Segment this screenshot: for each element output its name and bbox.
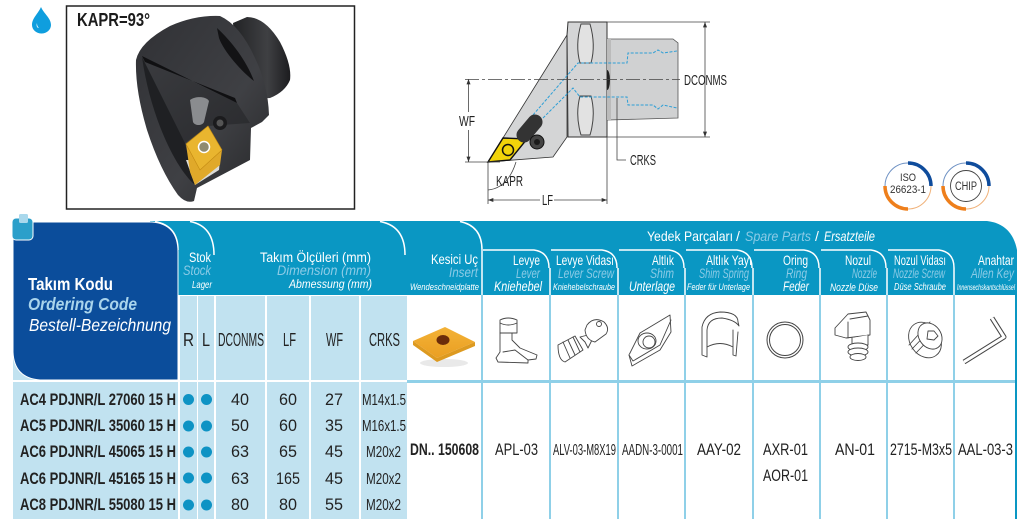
- dimension labels: LF: [542, 193, 553, 209]
- technical drawing with dimensions: [456, 22, 727, 209]
- table header band: [150, 221, 1017, 519]
- row 3: 45: [325, 442, 343, 461]
- icon: allen key: [964, 318, 1004, 362]
- tool head: [488, 22, 678, 162]
- insert and clamp: [488, 122, 544, 162]
- header: shim spring: Feder für Unterlage: [687, 282, 750, 293]
- header: insert: Insert: [449, 265, 479, 280]
- header: ring: Oring: [783, 252, 808, 268]
- row 4: [20, 469, 401, 488]
- row 5: 80: [279, 495, 297, 514]
- header: nozzle screw: Nozzle Screw: [893, 265, 946, 281]
- column labels: WF: [326, 330, 343, 350]
- row 3: AC6 PDJNR/L 45065 15 H: [20, 442, 176, 461]
- dimension lines: [456, 22, 710, 206]
- header: dimensions: Abmessung (mm): [288, 277, 372, 291]
- icon: coolant water drop: [32, 7, 51, 34]
- header: lever screw: Kniehebelschraube: [553, 282, 615, 293]
- icon: shim: [629, 315, 671, 366]
- header: lever: [494, 252, 543, 294]
- header: stock: Stok: [189, 250, 211, 265]
- header: lever screw: [553, 252, 615, 293]
- row 3: [20, 442, 401, 461]
- header: allen key: [957, 252, 1016, 292]
- row 1: 27: [325, 390, 343, 409]
- header: shim spring: [687, 252, 752, 293]
- part numbers: AADN-3-0001: [622, 442, 683, 459]
- icon: insert photo: [413, 327, 475, 367]
- header: insert: [410, 252, 479, 293]
- header: shim spring: Altlık Yayı: [706, 252, 752, 268]
- panel: ordering code heading: Ordering Code: [28, 294, 137, 314]
- icon: O-ring: [767, 322, 803, 358]
- header: nozzle: Nozzle Düse: [830, 282, 878, 294]
- column labels: [183, 330, 400, 350]
- icon: clipboard tab: [12, 214, 33, 240]
- row 1: M14x1.5: [362, 392, 406, 409]
- tool body render: [136, 16, 290, 202]
- dimension labels: KAPR: [496, 174, 523, 190]
- part numbers: 2715-M3x5: [890, 440, 952, 459]
- row 4: 165: [276, 469, 300, 488]
- icon: lever: [496, 318, 537, 363]
- part numbers: APL-03: [495, 440, 538, 459]
- header: shim: [629, 252, 675, 294]
- header: spare parts: Spare Parts: [745, 228, 811, 244]
- badge: ISO 26623-1: [885, 163, 931, 209]
- header: dimensions: Takım Ölçüleri (mm): [260, 250, 371, 265]
- badge: ISO 26623-1: ISO: [900, 172, 916, 184]
- header: nozzle: Nozul: [845, 252, 871, 268]
- header: spare parts: [647, 228, 875, 244]
- row 2: [20, 416, 406, 435]
- header: spare parts: Yedek Parçaları: [647, 228, 733, 244]
- column labels: CRKS: [369, 330, 400, 350]
- row 3: 63: [231, 442, 249, 461]
- light blue data columns: [13, 296, 407, 519]
- row 1: 40: [231, 390, 249, 409]
- header: shim spring: Shim Spring: [699, 265, 749, 281]
- badge: ISO 26623-1: 26623-1: [890, 184, 926, 196]
- part numbers: AXR-01: [763, 440, 808, 459]
- header: lever screw: Lever Screw: [558, 265, 615, 281]
- header: shim: Unterlage: [629, 278, 675, 294]
- white spare-part column area: [407, 250, 1015, 519]
- icon: nozzle screw: [902, 316, 948, 364]
- header: nozzle: Nozzle: [852, 265, 877, 281]
- header: lever: Kniehebel: [494, 278, 543, 294]
- header: ring: [783, 252, 810, 294]
- row 3: M20x2: [366, 444, 401, 461]
- column labels: L: [202, 330, 210, 350]
- dimension labels: WF: [459, 114, 475, 130]
- part numbers: AOR-01: [763, 466, 808, 485]
- badge: CHIP: CHIP: [955, 181, 977, 193]
- row 5: [20, 495, 401, 514]
- row 2: 50: [231, 416, 249, 435]
- icon: nozzle: [835, 312, 870, 360]
- header: lever screw: Levye Vidası: [556, 252, 614, 268]
- header: nozzle screw: [893, 252, 946, 293]
- row 5: 80: [231, 495, 249, 514]
- header: nozzle screw: Nozul Vidası: [894, 252, 946, 268]
- panel: ordering code heading: Takım Kodu: [28, 274, 113, 294]
- header: ring: Feder: [783, 278, 810, 294]
- row 2: 35: [325, 416, 343, 435]
- row 3: 65: [279, 442, 297, 461]
- row 5: AC8 PDJNR/L 55080 15 H: [20, 495, 176, 514]
- row 4: 63: [231, 469, 249, 488]
- header: spare parts: /: [736, 228, 740, 244]
- header: ring: Ring: [786, 265, 807, 281]
- header: spare parts: Ersatzteile: [824, 228, 875, 244]
- panel: tool photo with KAPR label: [66, 6, 354, 209]
- row 1: AC4 PDJNR/L 27060 15 H: [20, 390, 176, 409]
- panel: ordering code heading: [13, 222, 178, 380]
- dimension labels: CRKS: [630, 153, 656, 169]
- header: shim: Altlık: [652, 252, 675, 268]
- panel: ordering code heading: Bestell-Bezeichnung: [29, 315, 171, 335]
- header: spare parts: /: [815, 228, 819, 244]
- header: nozzle: [830, 252, 878, 294]
- row 4: 45: [325, 469, 343, 488]
- part numbers: [410, 440, 1013, 485]
- row 5: 55: [325, 495, 343, 514]
- header: stock: Lager: [192, 279, 212, 291]
- row 2: M16x1.5: [362, 418, 406, 435]
- part numbers: ALV-03-M8X19: [553, 442, 616, 459]
- part numbers: AAY-02: [697, 440, 741, 459]
- row 5: M20x2: [366, 497, 401, 514]
- header: insert: Kesici Uç: [431, 252, 478, 267]
- header: stock: Stock: [183, 263, 212, 278]
- icon: lever screw: [558, 320, 608, 362]
- header: shim: Shim: [650, 265, 674, 281]
- icon: shim spring: [702, 312, 739, 357]
- header: nozzle screw: Düse Schraube: [894, 282, 946, 293]
- part numbers: DN.. 150608: [410, 440, 479, 459]
- column labels: LF: [283, 330, 296, 350]
- header: dimensions: [260, 250, 372, 291]
- header: lever: Levye: [513, 252, 540, 268]
- row 1: 60: [279, 390, 297, 409]
- row 2: AC5 PDJNR/L 35060 15 H: [20, 416, 176, 435]
- header: dimensions: Dimension (mm): [277, 263, 371, 278]
- row 1: [20, 390, 406, 409]
- dimension labels: [459, 73, 727, 209]
- column labels: DCONMS: [218, 330, 264, 350]
- row 4: M20x2: [366, 471, 401, 488]
- column labels: R: [183, 330, 194, 350]
- part numbers: AN-01: [835, 440, 875, 459]
- header: stock: [183, 250, 212, 291]
- row 4: AC6 PDJNR/L 45165 15 H: [20, 469, 176, 488]
- badge: CHIP: [943, 163, 989, 209]
- header: insert: Wendeschneidplatte: [410, 282, 479, 293]
- dimension labels: DCONMS: [684, 73, 727, 89]
- label: KAPR=93°: KAPR=93°: [77, 10, 150, 30]
- row 2: 60: [279, 416, 297, 435]
- header: lever: Lever: [516, 265, 541, 281]
- coolant channels: [533, 50, 677, 118]
